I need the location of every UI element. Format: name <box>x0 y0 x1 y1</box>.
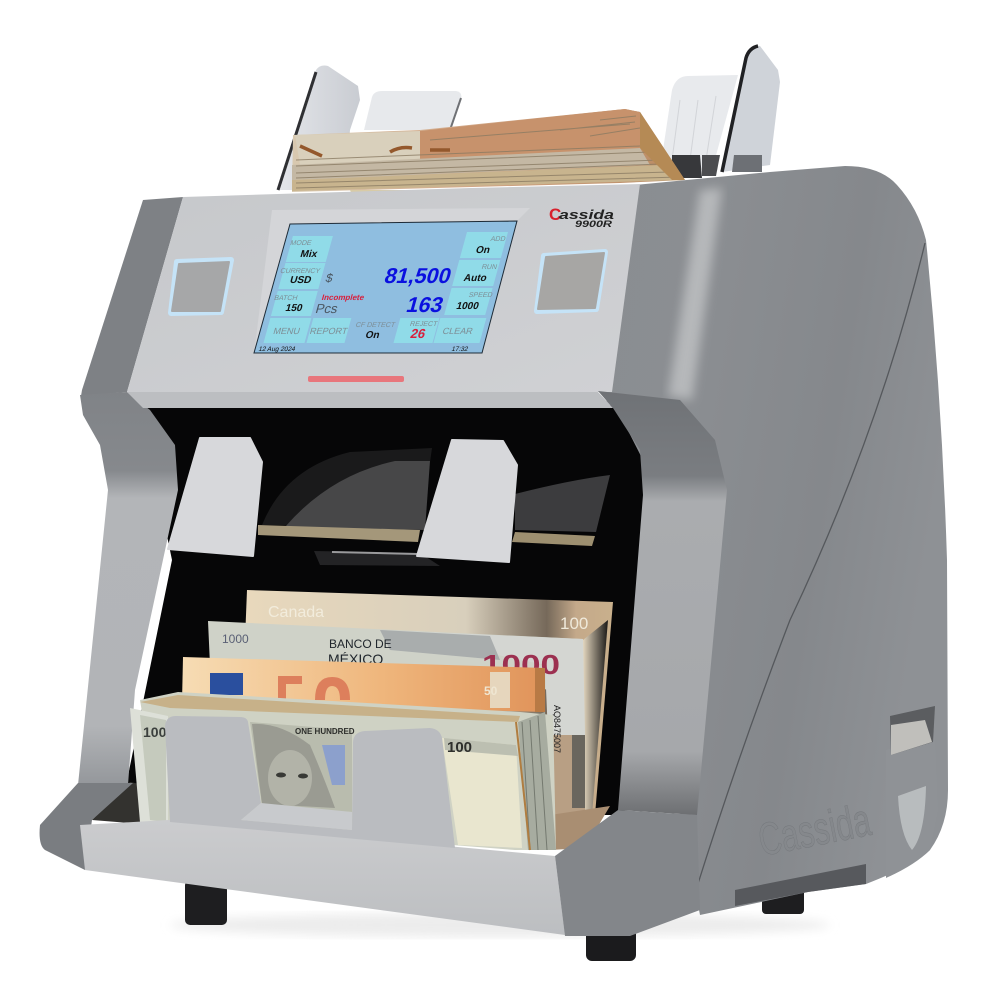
banknote: Mexico 1000: 1000 <box>222 632 249 646</box>
touch screen: 17:32 <box>451 346 469 353</box>
tray right corner <box>555 810 700 936</box>
touch screen: 1000 <box>455 301 480 312</box>
top banknote stack <box>292 109 685 195</box>
touch screen: CF DETECT <box>355 321 397 329</box>
banknote: Canada 100: Canada <box>268 604 324 621</box>
right front pillar <box>598 391 727 815</box>
brand logo <box>549 205 614 229</box>
black note chamber <box>120 405 648 815</box>
right square button <box>537 252 605 311</box>
panel lower lip <box>127 392 613 408</box>
touch screen: RUN <box>481 263 498 271</box>
tray floor under notes <box>550 806 610 850</box>
banknote: Canada 100 <box>245 590 613 815</box>
touch screen: Incomplete <box>321 293 366 302</box>
touch screen: Auto <box>462 273 488 284</box>
side cash slot and window <box>886 706 938 878</box>
embossed side logo: Cassida <box>754 793 875 866</box>
banknote: Euro 50 stack <box>182 657 545 712</box>
touch screen: 12 Aug 2024 <box>258 346 296 353</box>
touch screen: 81,500 <box>382 263 454 288</box>
brand logo: 9900R <box>575 219 613 229</box>
left feed paddle <box>168 438 262 556</box>
touch screen <box>254 221 517 353</box>
touch screen: USD <box>289 275 313 286</box>
touch screen: 163 <box>404 292 446 317</box>
left front pillar <box>78 392 178 785</box>
brand logo: C <box>549 205 561 224</box>
banknote: US dollar stack <box>130 692 556 850</box>
upper roller and note stack <box>258 448 610 566</box>
touch screen: $ <box>324 271 335 285</box>
touch screen: Pcs <box>314 301 340 316</box>
touch screen: On <box>474 245 491 256</box>
touch screen: REPORT <box>309 326 349 336</box>
banknote: Euro 50 stack: 50 <box>484 684 498 698</box>
top control panel <box>127 184 640 392</box>
touch screen: MODE <box>289 239 313 247</box>
touch screen: MENU <box>272 326 301 336</box>
touch screen: 26 <box>409 326 427 341</box>
side bottom slot <box>735 864 866 906</box>
banknote: Mexico 1000: BANCO DE <box>329 637 392 651</box>
tray front and hopper tabs <box>80 716 565 935</box>
banknote: US dollar stack: 100 <box>143 724 167 740</box>
touch screen: BATCH <box>273 294 299 302</box>
touch screen: REJECT <box>409 320 439 328</box>
rear hopper guides and wings <box>278 46 780 190</box>
banknote: Mexico 1000: AQ8475007 <box>552 705 562 753</box>
banknote: US dollar stack: ONE HUNDRED <box>295 727 355 736</box>
touch screen: On <box>364 330 381 341</box>
touch screen: CLEAR <box>441 326 474 336</box>
left square button <box>171 260 231 313</box>
right feed paddle <box>417 440 517 562</box>
brand logo: assida <box>559 207 614 222</box>
banknote: Canada 100: 100 <box>560 614 588 633</box>
left dark corner band <box>81 197 183 396</box>
machine right side body <box>605 166 948 915</box>
touch screen: CURRENCY <box>279 267 321 275</box>
screen bezel <box>254 208 530 354</box>
touch screen: 150 <box>284 303 304 314</box>
banknote: US dollar stack: 100 <box>447 739 472 756</box>
tray left corner <box>40 783 133 870</box>
tray interior shadow <box>92 782 168 826</box>
feet and ground shadow <box>170 880 830 961</box>
touch screen: SPEED <box>468 291 494 299</box>
touch screen: ADD <box>490 235 507 243</box>
banknote: Mexico 1000 <box>208 621 585 818</box>
red indicator light <box>308 376 404 382</box>
banknote: Mexico 1000: MÉXICO <box>328 651 383 667</box>
touch screen: Mix <box>299 249 319 260</box>
banknote: Mexico 1000: 1000 <box>482 649 560 680</box>
